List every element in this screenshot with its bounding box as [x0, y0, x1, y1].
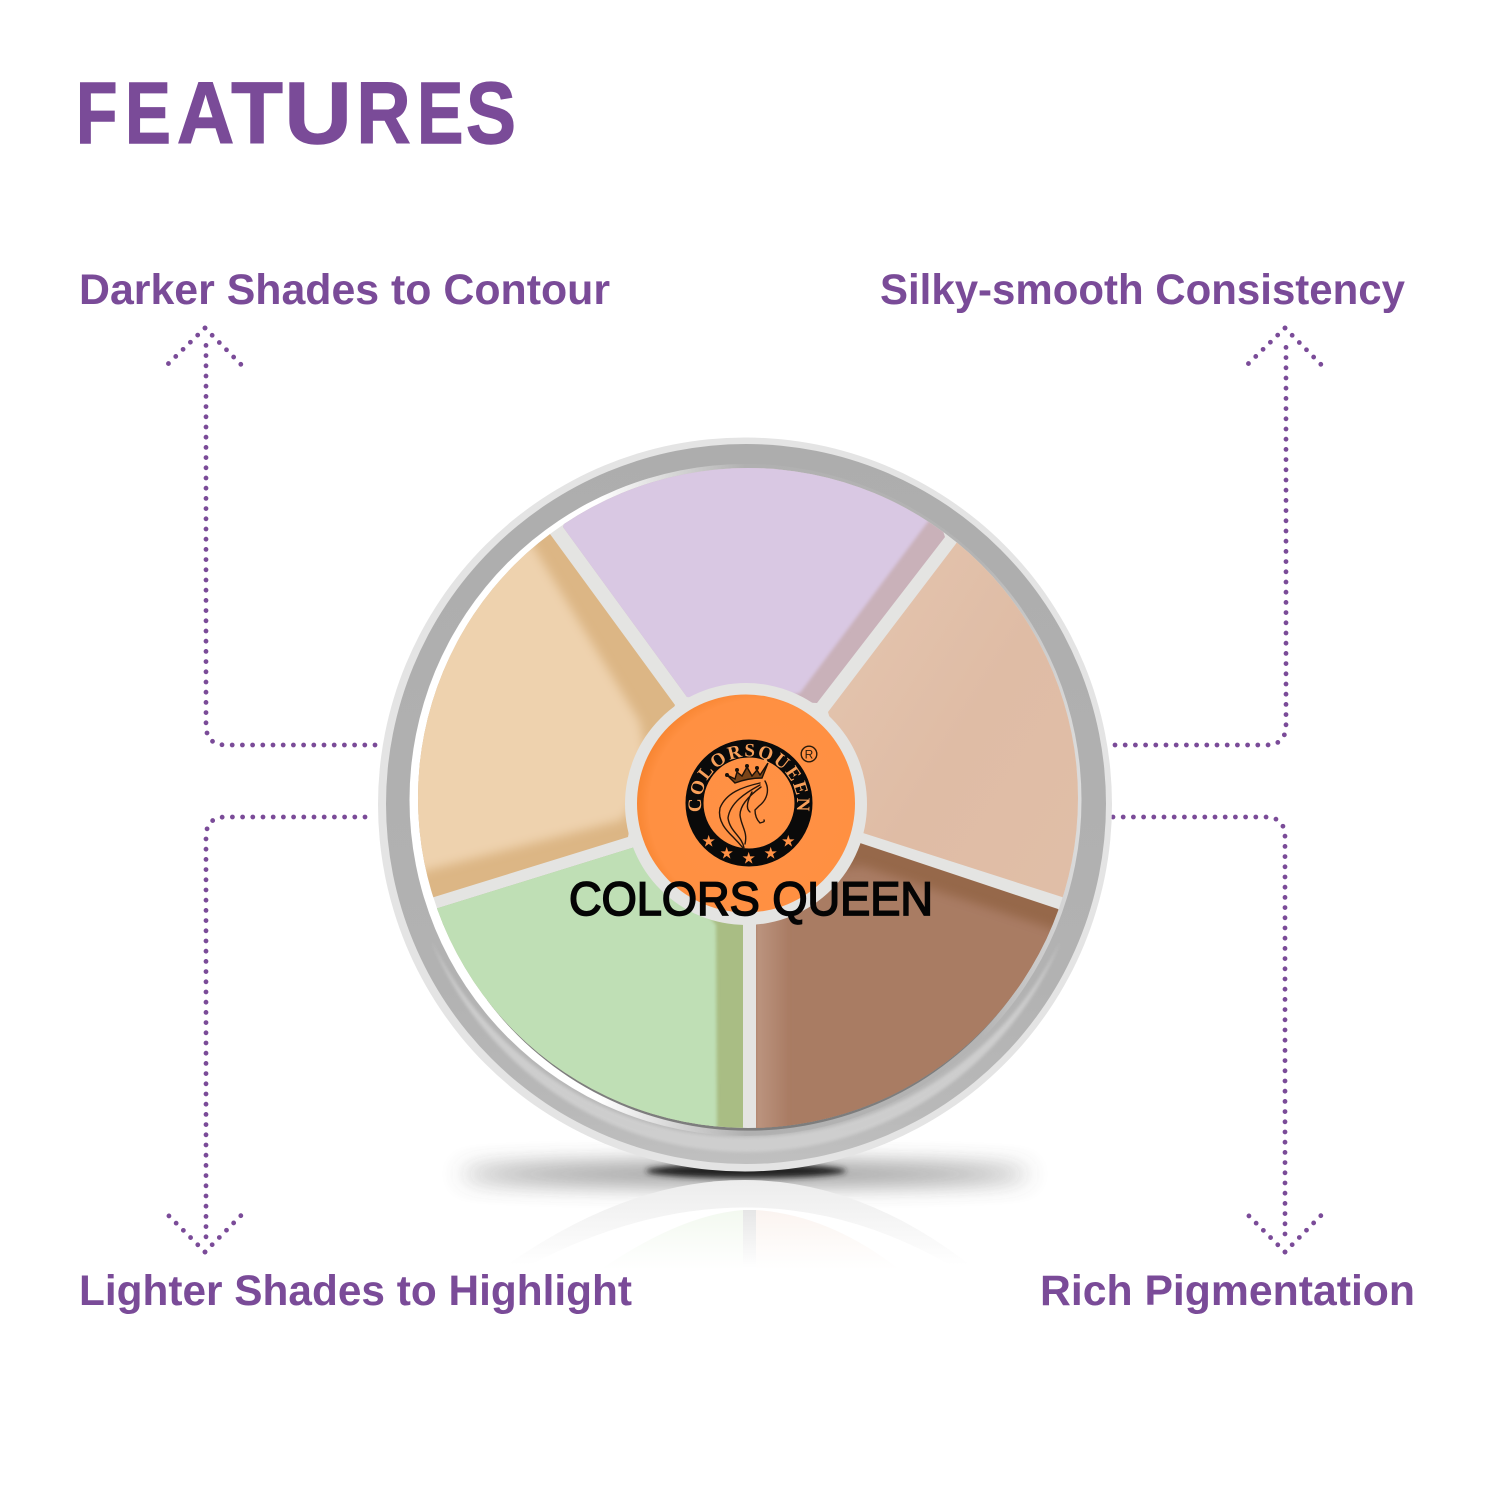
label: rich pigmentation: Rich Pigmentation: [1040, 1267, 1415, 1315]
label: silky-smooth: Silky-smooth Consistency: [880, 266, 1405, 314]
registered mark: R: [805, 748, 814, 762]
tray: [418, 468, 1078, 1128]
reflection: [507, 1180, 970, 1270]
title: U: [284, 65, 352, 162]
infographic canvas: [80, 81, 1412, 1314]
label: darker shades: Darker Shades to Contour: [79, 266, 610, 314]
logo stars: ★: [702, 832, 716, 850]
title: E: [125, 64, 171, 162]
segment: brown: [756, 843, 1058, 1128]
arrow: bottom right: [1113, 817, 1322, 1252]
segments: [418, 468, 1078, 1128]
logo stars: ★: [742, 848, 756, 868]
logo stars: [702, 832, 795, 868]
segment: left peach: [418, 534, 675, 898]
title: E: [417, 65, 463, 162]
title: S: [466, 66, 516, 162]
logo stars: ★: [781, 832, 795, 850]
brand name: COLORS QUEEN: [569, 872, 933, 925]
segment: right peach: [828, 542, 1078, 898]
arrow: top right: [1115, 328, 1322, 745]
label: lighter shades: Lighter Shades to Highlight: [79, 1267, 632, 1315]
logo stars: ★: [764, 844, 778, 862]
logo stars: ★: [720, 844, 734, 862]
arrow: top left: [168, 328, 375, 745]
title: [76, 64, 516, 162]
central hub: [625, 683, 867, 925]
metal rim: [378, 438, 1112, 1172]
title: R: [356, 66, 411, 162]
floor shadow: [460, 1164, 1030, 1183]
logo crown: [726, 763, 768, 783]
segment: lilac: [563, 468, 945, 703]
title: F: [76, 64, 117, 162]
title: A: [177, 65, 234, 162]
logo ring text: COLORSQUEEN: [688, 744, 810, 812]
segment: green: [437, 848, 743, 1128]
arrow: bottom left: [168, 817, 365, 1252]
title: T: [231, 65, 283, 162]
brand logo: [686, 740, 818, 868]
product: concealer palette: [378, 438, 1112, 1172]
logo woman profile: [719, 781, 767, 849]
